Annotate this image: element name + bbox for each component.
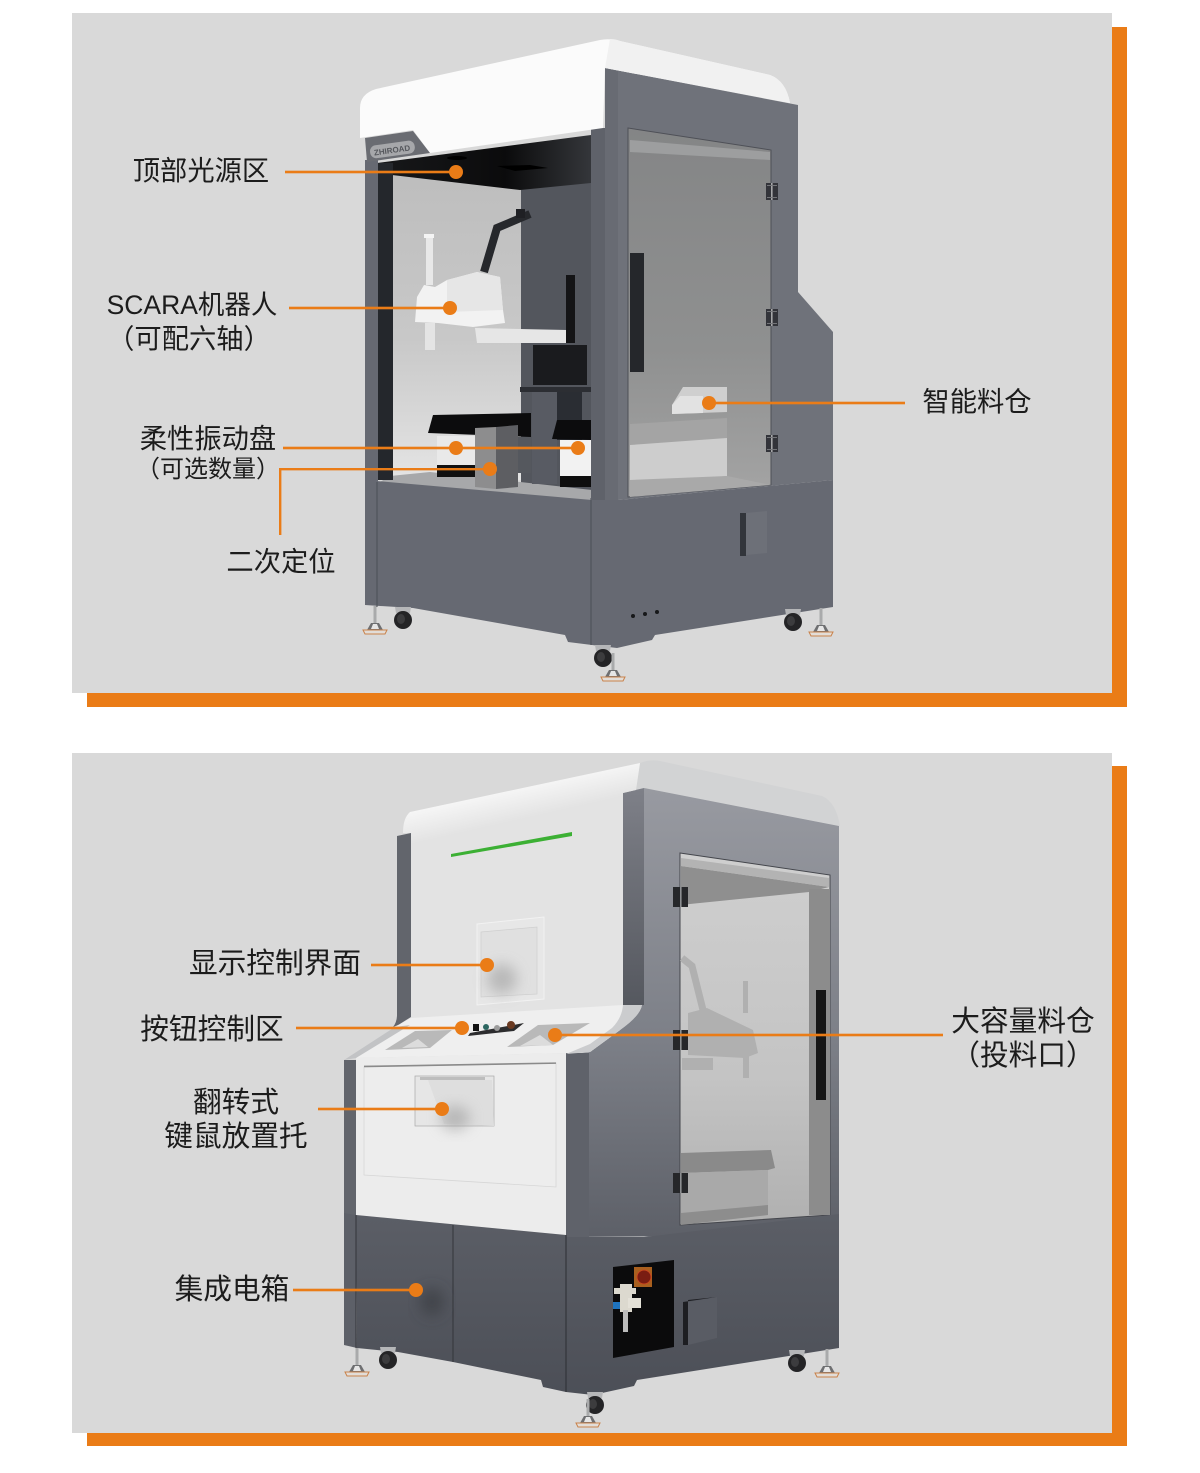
- door hinges: [673, 887, 688, 1193]
- storage bin hopper: [672, 387, 727, 414]
- logo text: ZHIROAD: [373, 143, 411, 157]
- button panel: [468, 1021, 524, 1036]
- keyboard flip tray: [415, 1076, 494, 1130]
- label: flexible vibration tray: [136, 423, 280, 483]
- robot body: [415, 272, 505, 327]
- label: large capacity storage: [951, 1006, 1095, 1072]
- label: display control: 显示控制界面: [189, 948, 361, 980]
- storage door window: [628, 128, 771, 497]
- robot shaft: [426, 235, 433, 285]
- base cabinet: [365, 480, 833, 648]
- base divider lines: [377, 482, 591, 645]
- right vibration tray: [552, 420, 591, 487]
- right side panel: [566, 788, 839, 1237]
- vertical black rod: [566, 275, 575, 343]
- left vibration tray: [428, 413, 531, 477]
- label: secondary positioning: 二次定位: [226, 546, 336, 577]
- left lower strip: [344, 1060, 356, 1215]
- top panel orange backing: [87, 27, 1127, 707]
- robot pedestal: [520, 387, 591, 484]
- label: flexible vibration tray: 柔性振动盘: [140, 423, 276, 454]
- window right column: [809, 889, 830, 1215]
- window ceiling band: [681, 866, 829, 905]
- label: button control area: 按钮控制区: [140, 1014, 284, 1046]
- label: SCARA robot: （可配六轴）: [107, 323, 271, 354]
- corner post: [591, 68, 618, 500]
- interior right wall: [521, 175, 592, 495]
- storage bin block: [630, 418, 771, 497]
- leader lines and dots: [279, 165, 905, 535]
- label: large capacity storage: 大容量料仓: [951, 1006, 1095, 1038]
- ceiling light slots: [447, 156, 548, 171]
- ghost robot inside: [682, 958, 758, 1078]
- window top band: [630, 140, 770, 160]
- left post: [365, 160, 393, 482]
- top panel gray background: [72, 13, 1112, 693]
- label: top light source: 顶部光源区: [133, 155, 269, 186]
- panel: top machine: [72, 13, 1127, 707]
- canopy right part: [636, 760, 840, 826]
- shelf top surface: [356, 1005, 642, 1058]
- machine illustration: open-door robot cell: [360, 39, 833, 681]
- touch display: [477, 917, 544, 1005]
- label: flip keyboard tray: 键鼠放置托: [164, 1121, 308, 1153]
- white upper front: [356, 763, 642, 1058]
- utility cutout: [613, 1260, 674, 1358]
- label: SCARA robot: [107, 290, 277, 354]
- robot cable: [484, 214, 530, 272]
- base side handle: [740, 511, 767, 556]
- label: flip keyboard tray: 翻转式: [193, 1087, 279, 1119]
- air filter regulator: [614, 1288, 636, 1294]
- robot tool: [425, 323, 435, 350]
- robot motor: [533, 345, 587, 385]
- robot arm link: [475, 328, 567, 343]
- label: SCARA robot: SCARA机器人: [107, 290, 277, 320]
- storage door window: [680, 853, 830, 1225]
- base cabinet front doors: [344, 1213, 566, 1392]
- bottom panel gray background: [72, 753, 1112, 1433]
- base side handle: [683, 1297, 717, 1345]
- hopper openings: [385, 1023, 590, 1050]
- door hinges: [766, 183, 778, 452]
- left upper strip: [393, 833, 411, 1027]
- panel: bottom machine: [72, 753, 1127, 1446]
- shelf left edge: [344, 1025, 410, 1060]
- label: flexible vibration tray: （可选数量）: [136, 456, 280, 483]
- main power switch: [634, 1267, 652, 1287]
- interior back wall: [390, 165, 525, 480]
- label: flip keyboard tray: [164, 1087, 308, 1153]
- feet and casters: [363, 606, 833, 681]
- door handle: [630, 253, 644, 372]
- secondary positioning block: [475, 425, 518, 489]
- label: large capacity storage: （投料口）: [951, 1040, 1095, 1072]
- canopy white top: [360, 39, 790, 153]
- right side panel: [592, 68, 833, 500]
- green indicator strip: [451, 832, 572, 857]
- base cabinet right: [566, 1214, 839, 1395]
- lower corner strip: [566, 1053, 589, 1239]
- bottom panel orange backing: [87, 766, 1127, 1446]
- feet and casters: [345, 1347, 839, 1427]
- base sockets: [631, 610, 659, 618]
- upper rear corner strip: [623, 788, 644, 1005]
- leader lines and dots: [293, 958, 943, 1297]
- SCARA robot: [415, 209, 587, 385]
- machine illustration: rear view: [344, 760, 840, 1427]
- white lower front: [356, 1053, 566, 1235]
- door black handle: [816, 990, 826, 1100]
- interior floor: [380, 472, 592, 502]
- canopy ceiling: [377, 135, 591, 190]
- logo plate: [365, 131, 430, 162]
- label: smart storage: 智能料仓: [922, 386, 1032, 417]
- label: integrated electric box: 集成电箱: [175, 1274, 289, 1306]
- ghost vibration tray: [681, 1150, 775, 1225]
- shelf right edge: [566, 1005, 642, 1054]
- drawer outline: [364, 1063, 556, 1187]
